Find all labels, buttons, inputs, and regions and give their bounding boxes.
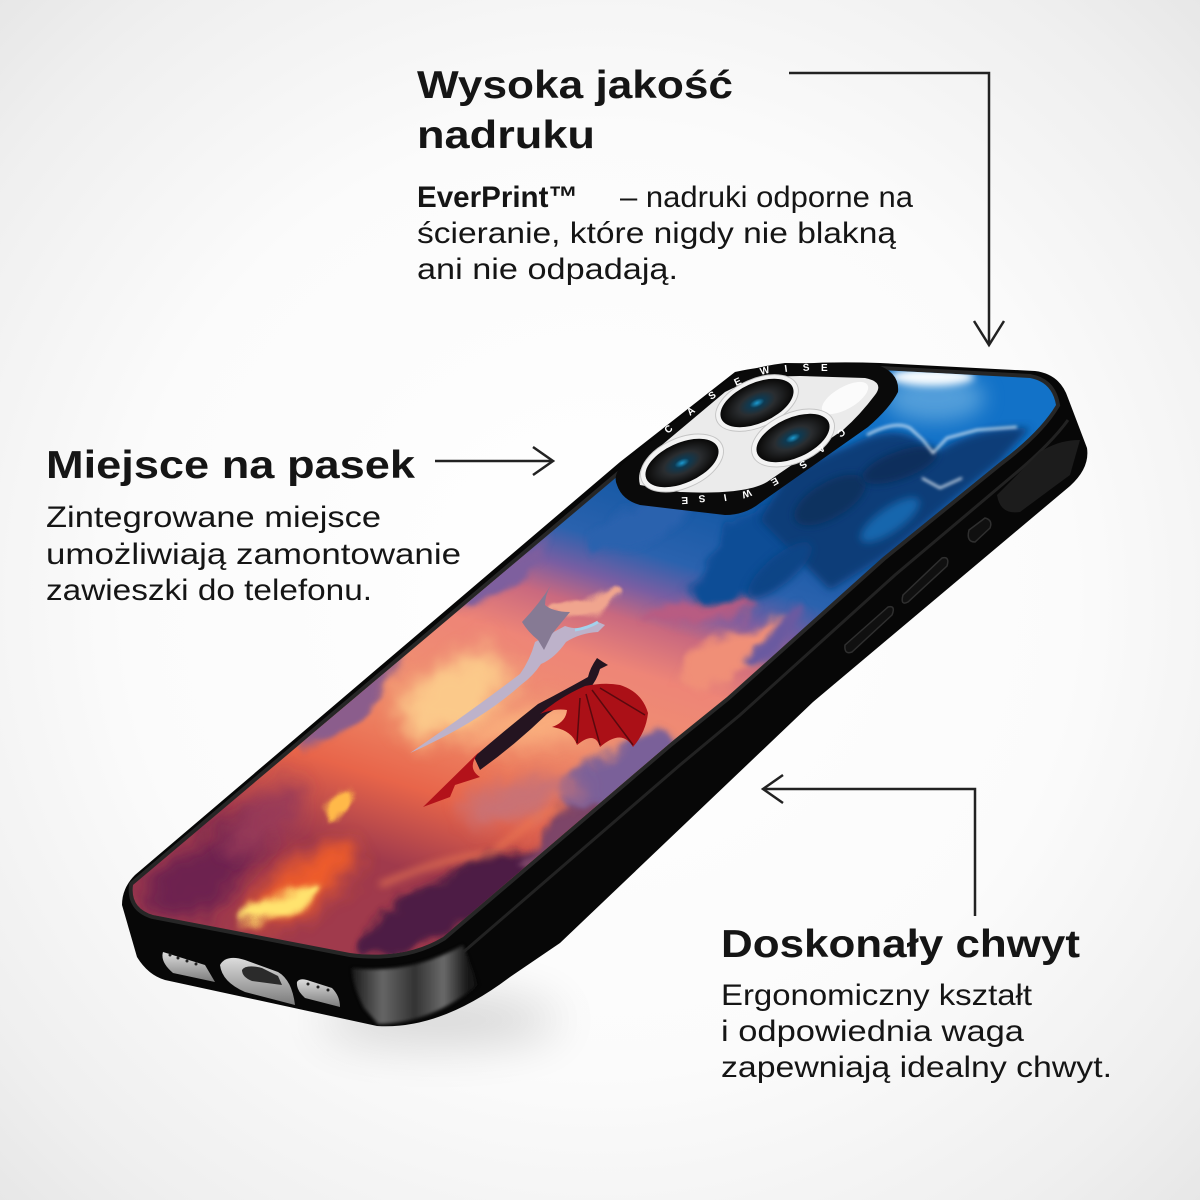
white dragon xyxy=(410,585,605,753)
speaker right xyxy=(297,979,340,1007)
description: – nadruki odporne na xyxy=(620,181,913,214)
side buttons xyxy=(845,440,1080,653)
heading: Wysoka jakość xyxy=(417,64,733,107)
charging port xyxy=(220,958,295,1005)
heading: Doskonały chwyt xyxy=(721,923,1080,966)
phone shadow xyxy=(320,996,560,1044)
description: Ergonomiczny kształt xyxy=(721,979,1033,1012)
description xyxy=(417,181,913,286)
heading: nadruku xyxy=(417,114,595,157)
printed artwork xyxy=(132,363,1056,988)
lens right xyxy=(743,397,843,479)
speaker left xyxy=(162,952,215,982)
callout: print quality xyxy=(417,64,913,286)
glossy corner highlight xyxy=(352,945,478,1024)
heading: Miejsce na pasek xyxy=(46,444,415,487)
heading xyxy=(417,64,733,157)
case body xyxy=(122,362,1087,1026)
lens top xyxy=(707,363,807,443)
description: ścieranie, które nigdy nie blakną xyxy=(417,217,896,250)
description: zapewniają idealny chwyt. xyxy=(721,1051,1112,1084)
red dragon xyxy=(423,658,648,807)
description: umożliwiają zamontowanie xyxy=(46,538,461,571)
description: Zintegrowane miejsce xyxy=(46,501,381,534)
description xyxy=(721,979,1112,1084)
description: zawieszki do telefonu. xyxy=(46,574,372,607)
bottom ports xyxy=(162,952,340,1007)
callout: grip xyxy=(721,923,1112,1084)
arrow: grip xyxy=(763,775,975,916)
camera ring lettering top: CASEWISE xyxy=(663,363,828,436)
description: EverPrint™ xyxy=(417,181,578,214)
lens left xyxy=(632,422,732,504)
description xyxy=(46,501,461,607)
camera island xyxy=(616,363,898,515)
camera ring lettering bottom: CASEWISE xyxy=(681,426,847,505)
arrow: print quality xyxy=(789,73,1004,345)
description: ani nie odpadają. xyxy=(417,253,678,286)
case inner rim xyxy=(133,370,1056,955)
callout: strap slot xyxy=(46,444,461,607)
arrow: strap slot xyxy=(435,447,553,475)
phone case illustration xyxy=(100,350,1100,1026)
description: i odpowiednia waga xyxy=(721,1015,1024,1048)
case outer rim highlight xyxy=(460,420,1068,955)
